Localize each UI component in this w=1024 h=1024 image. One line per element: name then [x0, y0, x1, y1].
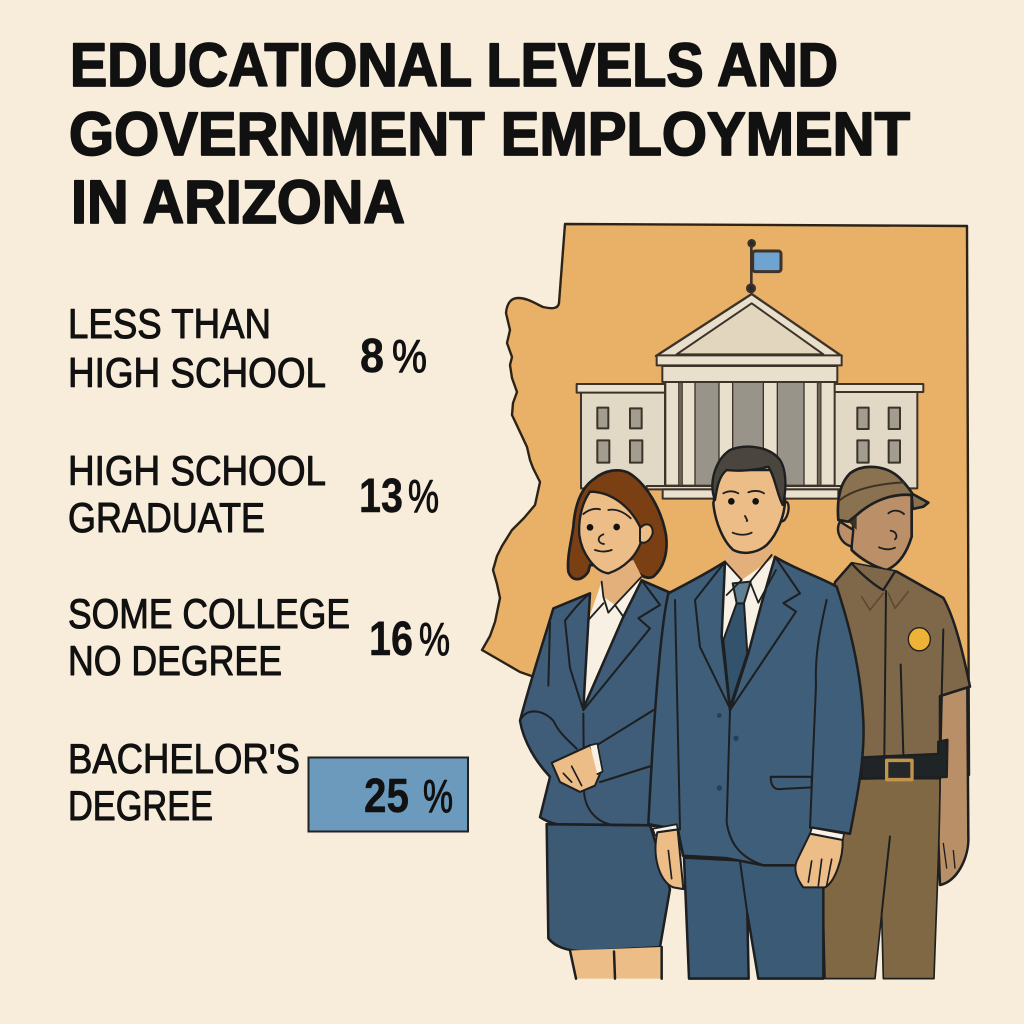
title: EDUCATIONAL LEVELS AND [70, 31, 838, 99]
base steps [647, 486, 850, 499]
stat: bachelor's degree highlighted: % [423, 770, 453, 822]
stat: some college no degree: SOME COLLEGE [68, 590, 350, 637]
stat: high school graduate [68, 447, 439, 541]
right wing [834, 384, 923, 488]
stat: bachelor's degree highlighted [68, 735, 468, 832]
people [520, 447, 970, 979]
left wing [577, 384, 665, 488]
man head [712, 447, 789, 603]
flag [747, 240, 781, 292]
stat: high school graduate: % [408, 470, 439, 522]
portico roof [656, 294, 842, 382]
man's shirt cuffs [653, 824, 844, 841]
columns [665, 380, 835, 486]
stat: less than high school: LESS THAN [68, 300, 271, 347]
stat: less than high school: HIGH SCHOOL [68, 349, 326, 396]
stat: bachelor's degree highlighted: 25 [364, 770, 409, 823]
stat: some college no degree [68, 590, 450, 684]
stat: bachelor's degree highlighted: BACHELOR'S [68, 735, 300, 782]
man neck, shirt and tie [722, 540, 775, 708]
person: woman in navy suit [520, 470, 670, 979]
stat: bachelor's degree highlighted: DEGREE [68, 782, 213, 829]
stat: high school graduate: HIGH SCHOOL [68, 447, 326, 494]
woman hair, neck and blouse [568, 470, 667, 710]
stat: less than high school [68, 300, 427, 396]
man's hands [656, 829, 683, 889]
stat: some college no degree: 16 [369, 613, 413, 666]
stat: some college no degree: % [419, 613, 450, 665]
title: IN ARIZONA [71, 168, 405, 236]
map of Arizona [482, 224, 969, 775]
building [577, 240, 923, 499]
stat: less than high school: 8 [360, 330, 384, 383]
stat: high school graduate: GRADUATE [68, 494, 265, 541]
title [69, 31, 910, 236]
woman's hands [552, 745, 602, 792]
badge [908, 628, 930, 651]
man's buttons [717, 713, 739, 791]
stat: some college no degree: NO DEGREE [68, 637, 282, 684]
stat: high school graduate: 13 [359, 470, 403, 523]
woman face [579, 492, 653, 620]
person: man in navy suit [648, 447, 864, 979]
officer head [838, 467, 928, 610]
title: GOVERNMENT EMPLOYMENT [69, 100, 910, 168]
stat: less than high school: % [392, 330, 427, 382]
person: uniformed officer [810, 467, 970, 979]
